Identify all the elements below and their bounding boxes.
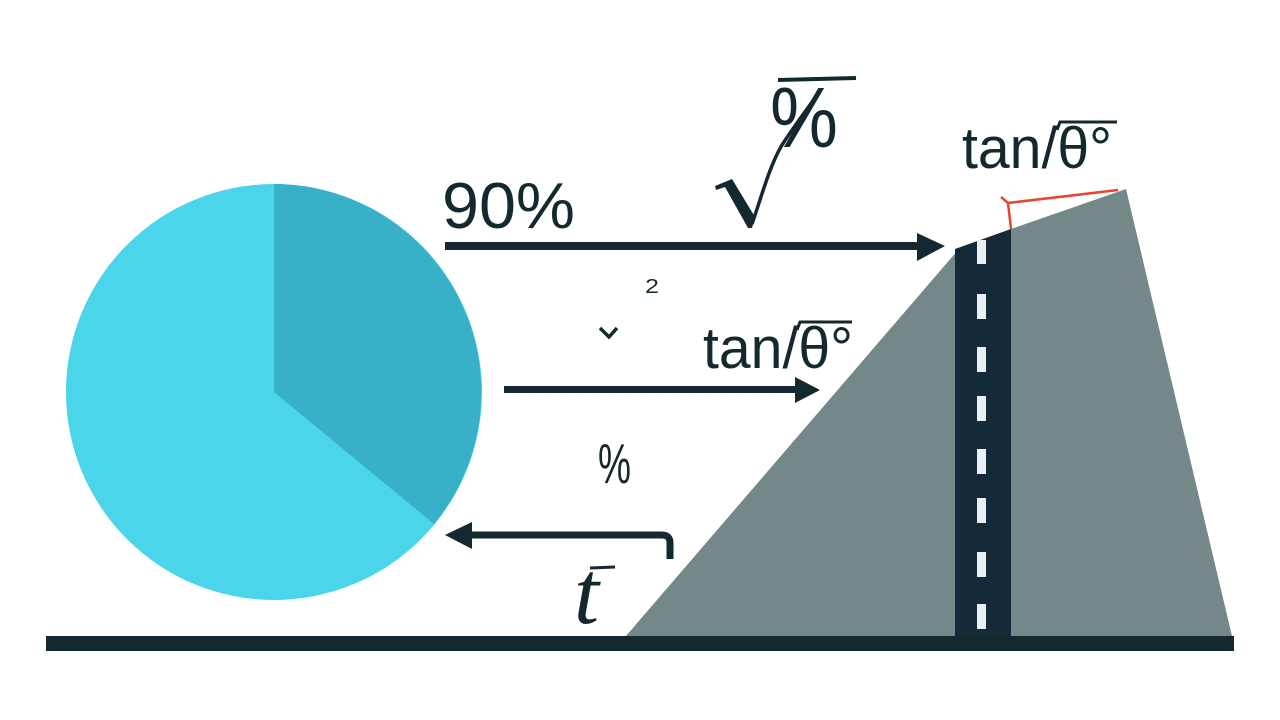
small superscript 2: 2 <box>645 276 659 298</box>
road <box>955 229 1011 636</box>
arrow: return left <box>445 522 670 559</box>
slope shape <box>626 189 1232 636</box>
pie chart <box>66 184 482 600</box>
root symbol with percent <box>715 71 856 228</box>
label: tan theta top: tan/θ° <box>962 116 1112 181</box>
italic t symbol: t <box>574 544 601 643</box>
label: 90 percent: 90% <box>442 169 575 242</box>
small percent label: % <box>598 432 631 496</box>
arrow: top right <box>445 233 945 261</box>
red angle marker <box>1001 190 1118 229</box>
ground line <box>46 636 1234 651</box>
italic t symbol <box>574 544 615 643</box>
small check mark <box>600 328 617 337</box>
arrow: middle right <box>504 377 820 403</box>
label: tan theta middle: tan/θ° <box>703 316 853 381</box>
root symbol with percent: % <box>770 71 838 166</box>
